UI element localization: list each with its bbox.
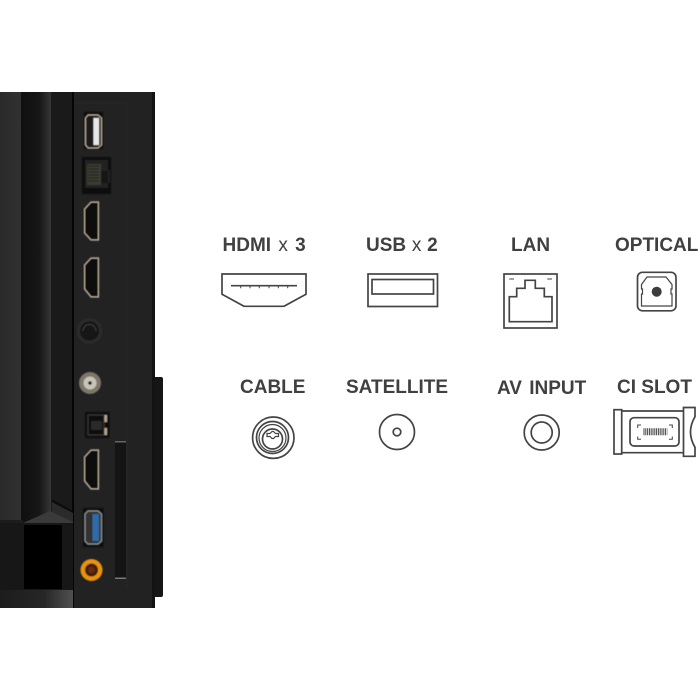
label: CI SLOT: CI SLOT — [617, 377, 692, 398]
port: CI slot — [115, 441, 126, 579]
icon: CABLE — [253, 417, 294, 458]
bracket — [155, 377, 163, 597]
label: AV INPUT: AV INPUT — [497, 378, 587, 399]
port: USB blue — [83, 508, 104, 547]
port: coaxial cable — [76, 318, 102, 344]
label: HDMI x 3: HDMI x 3 — [222, 235, 306, 256]
label: USB x 2: USB x 2 — [366, 235, 438, 256]
icon: SATELLITE — [380, 414, 414, 450]
icon: HDMI — [222, 274, 306, 306]
icon: LAN — [504, 274, 557, 328]
icon: OPTICAL — [638, 272, 676, 311]
icon: CI SLOT — [614, 408, 695, 456]
port: LAN — [82, 157, 111, 194]
port: HDMI 2 — [84, 258, 98, 297]
port: USB white — [84, 112, 103, 149]
port: AV orange — [80, 559, 102, 581]
label: OPTICAL: OPTICAL — [615, 235, 699, 256]
label: LAN: LAN — [511, 235, 550, 256]
label: SATELLITE: SATELLITE — [346, 377, 448, 398]
stand — [0, 499, 73, 608]
port: satellite — [79, 372, 101, 394]
icon: AV INPUT — [524, 415, 559, 450]
label: CABLE: CABLE — [240, 377, 305, 398]
port: optical — [85, 412, 110, 438]
port: HDMI 1 — [84, 202, 98, 240]
icon: USB — [368, 274, 438, 306]
TV rear panel — [0, 92, 163, 608]
port: HDMI 3 — [84, 450, 98, 489]
